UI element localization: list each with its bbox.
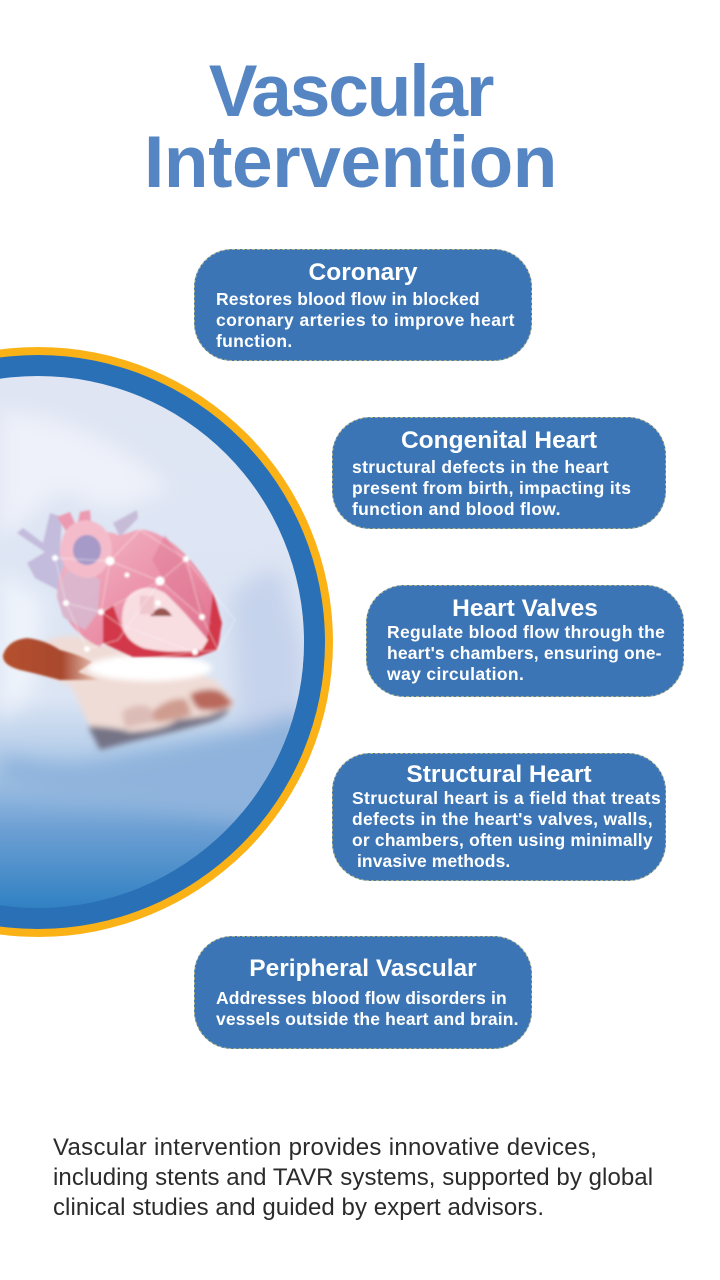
card text: function. [216, 331, 293, 351]
card heading: Peripheral Vascular [249, 955, 477, 982]
title: Vascular [209, 51, 492, 132]
footer text: including stents and TAVR systems, supported by global [53, 1164, 653, 1191]
card: Structural Heart [332, 753, 666, 881]
card text: heart's chambers, ensuring one- [387, 643, 662, 663]
card heading: Congenital Heart [401, 427, 597, 454]
image: circular heart photo [0, 347, 333, 937]
card text: defects in the heart's valves, walls, [352, 809, 653, 829]
card text: structural defects in the heart [352, 457, 609, 477]
card: Peripheral Vascular [194, 936, 532, 1049]
card text: invasive methods. [357, 851, 510, 871]
title: Intervention [144, 122, 557, 203]
card text [352, 788, 661, 871]
icon: glowing heart [17, 510, 235, 667]
card text: Regulate blood flow through the [387, 622, 665, 642]
card heading: Coronary [309, 259, 417, 286]
card text: or chambers, often using minimally [352, 830, 653, 850]
card text [216, 988, 519, 1029]
card text: Restores blood flow in blocked [216, 289, 480, 309]
footer text: clinical studies and guided by expert advisors. [53, 1194, 544, 1221]
card heading: Structural Heart [406, 761, 592, 788]
light points [52, 555, 205, 667]
card text: function and blood flow. [352, 499, 561, 519]
coat folds [0, 410, 304, 830]
card text: coronary arteries to improve heart [216, 310, 515, 330]
card text: Structural heart is a field that treats [352, 788, 661, 808]
mesh lines [56, 529, 220, 659]
card text [387, 622, 665, 684]
card text: present from birth, impacting its [352, 478, 631, 498]
footer text: Vascular intervention provides innovative devices, [53, 1134, 597, 1161]
footer text [53, 1134, 653, 1221]
card text: vessels outside the heart and brain. [216, 1009, 519, 1029]
card text [352, 457, 631, 519]
icon: open hand [43, 636, 233, 750]
card text [216, 289, 515, 351]
card: Congenital Heart [332, 417, 666, 529]
card: Heart Valves [366, 585, 684, 697]
card: Coronary [194, 249, 532, 361]
card text: Addresses blood flow disorders in [216, 988, 507, 1008]
card heading: Heart Valves [452, 595, 598, 622]
title [144, 51, 557, 203]
card text: way circulation. [387, 664, 524, 684]
